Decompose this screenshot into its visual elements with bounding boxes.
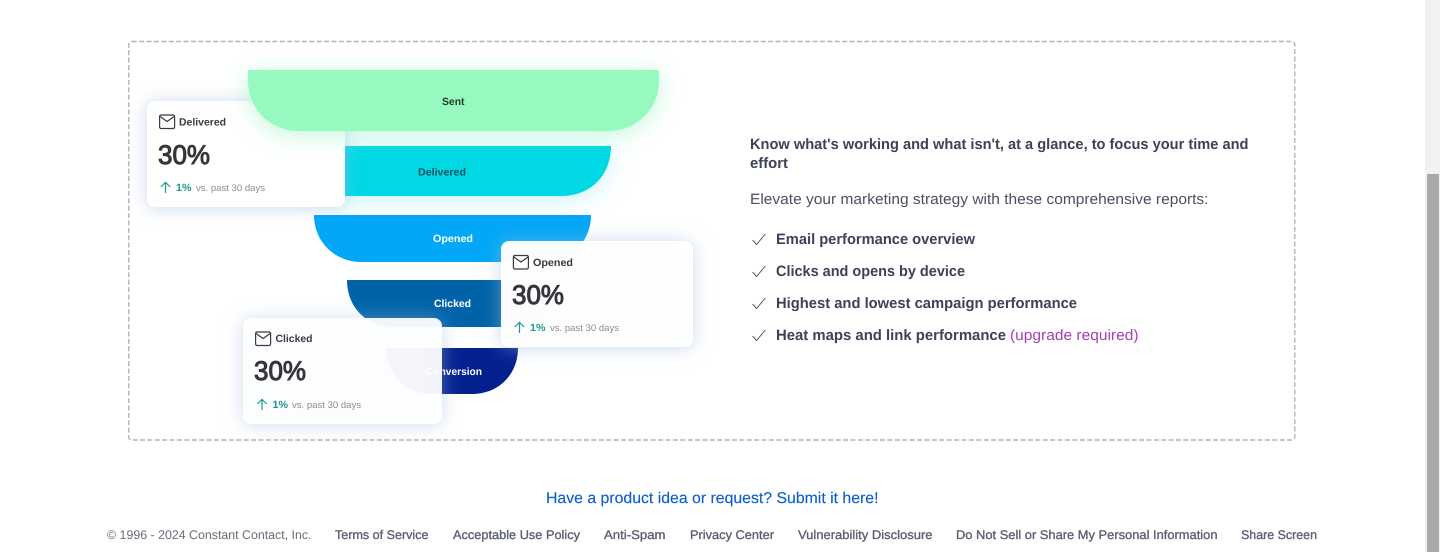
scrollbar (1425, 0, 1440, 552)
feature list (752, 231, 1138, 344)
heading: effort (750, 155, 788, 172)
funnel bar: sent: Sent (442, 96, 465, 108)
card: clicked: 30% (254, 356, 306, 386)
card: clicked: 1% (272, 399, 289, 411)
card: opened: 30% (512, 280, 564, 310)
list item: heat maps (752, 327, 1138, 344)
funnel bar: clicked (347, 280, 559, 327)
icon: up arrow (161, 182, 170, 193)
card: delivered: Delivered (179, 116, 226, 128)
card: delivered: vs. past 30 days (196, 183, 265, 194)
funnel bar: conversion: Conversion (426, 366, 482, 378)
footer links: Terms of Service (335, 528, 429, 542)
funnel bar: opened: Opened (433, 233, 473, 245)
funnel bar: delivered: Delivered (418, 166, 466, 178)
card: delivered: 1% (176, 182, 192, 194)
card: clicked: Clicked (276, 333, 312, 345)
heading (750, 136, 1248, 172)
footer links: Vulnerability Disclosure (798, 528, 933, 542)
footer links: Anti-Spam (604, 528, 666, 542)
footer links: Acceptable Use Policy (453, 528, 581, 542)
list item: heat maps: Heat maps and link performance (776, 327, 1006, 344)
icon: up arrow (257, 399, 267, 410)
footer links: Do Not Sell or Share My Personal Information (956, 528, 1218, 542)
icon: up arrow (515, 322, 524, 333)
card: delivered: 30% (158, 140, 210, 170)
card: opened: 1% (530, 322, 546, 334)
intro text: Elevate your marketing strategy with these comprehensive reports: (750, 191, 1208, 208)
funnel bar: sent (248, 70, 659, 131)
copy block (750, 136, 1248, 344)
list item: heat maps: (upgrade required) (1010, 327, 1138, 344)
funnel bar: conversion (386, 348, 518, 394)
card: delivered (147, 101, 345, 207)
dashed section frame (129, 42, 1295, 440)
icon: envelope (513, 256, 528, 269)
funnel bar: delivered (295, 146, 611, 196)
icon: envelope (256, 332, 271, 346)
footer links: Share Screen (1241, 528, 1317, 542)
card: clicked: vs. past 30 days (292, 400, 361, 411)
footer links (107, 528, 1317, 542)
funnel bar: opened (314, 215, 591, 262)
card: opened: Opened (533, 257, 573, 269)
footer links: Privacy Center (690, 528, 774, 542)
card: opened (501, 241, 693, 347)
footer links: © 1996 - 2024 Constant Contact, Inc. (107, 528, 312, 542)
funnel chart (147, 70, 693, 424)
icon: envelope (160, 115, 175, 128)
list item: email performance: Email performance overview (776, 231, 975, 248)
heading: Know what's working and what isn't, at a glance, to focus your time and (750, 136, 1248, 153)
product idea link: Have a product idea or request? Submit it here! (546, 490, 878, 507)
card: clicked (243, 318, 442, 424)
list item: highest and lowest: Highest and lowest campaign performance (776, 295, 1077, 312)
funnel bar: clicked: Clicked (434, 298, 471, 310)
card: opened: vs. past 30 days (550, 323, 619, 334)
list item: clicks and opens: Clicks and opens by device (776, 263, 965, 280)
